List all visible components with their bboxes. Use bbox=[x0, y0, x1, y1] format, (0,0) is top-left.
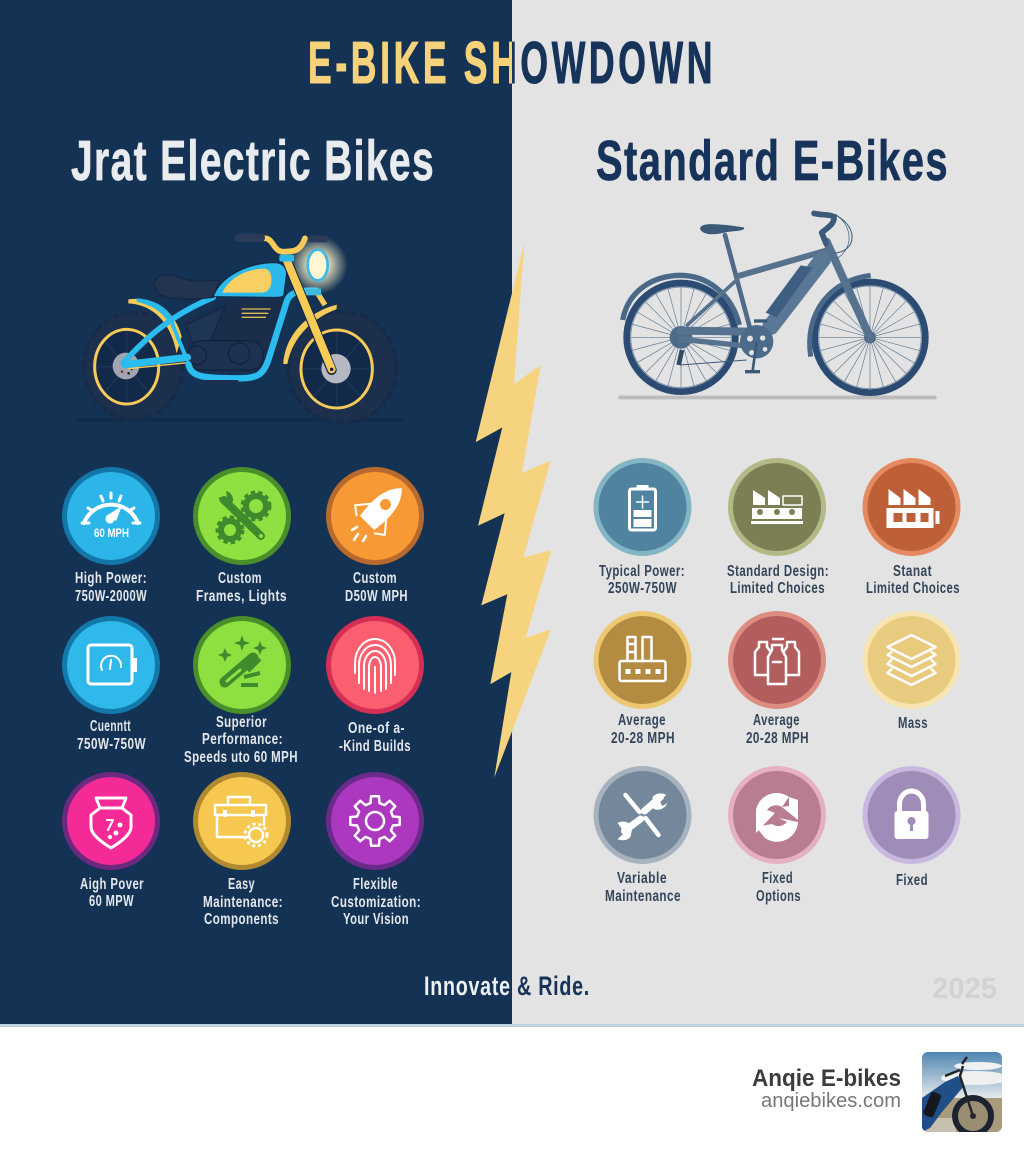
front bike wheel bbox=[810, 275, 925, 393]
icon: padlock bbox=[862, 766, 960, 864]
panel: right grey background bbox=[512, 0, 1024, 1025]
feature: Easy Maintenance: Components bbox=[204, 911, 279, 928]
feature: Variable Maintenance: Maintenance bbox=[605, 888, 681, 905]
feature: Current: 750W-750W bbox=[77, 736, 146, 753]
footer url: anqiebikes.com bbox=[761, 1090, 901, 1112]
front wheel bbox=[288, 312, 397, 423]
feature: Superior Performance: Performance: bbox=[202, 731, 283, 748]
battery bbox=[766, 265, 813, 317]
feature: Custom Frames: Custom bbox=[218, 570, 262, 587]
feature: Average Speed 2 bbox=[728, 611, 826, 747]
icon: factory line bbox=[728, 458, 826, 556]
feature: Flexible Customization: Flexible bbox=[353, 876, 398, 893]
rear fender bbox=[128, 299, 182, 353]
headlight bbox=[308, 250, 328, 280]
feature: High Power 60 bbox=[62, 772, 160, 910]
icon: battery bbox=[594, 458, 692, 556]
feature: Flexible Customization: Customization: bbox=[331, 894, 421, 911]
rear bike wheel bbox=[623, 275, 739, 392]
feature: Stanat bbox=[862, 458, 960, 597]
feature: Fixed Options: Fixed bbox=[762, 870, 793, 887]
feature: Average Speed 2: 20-28 MPH bbox=[746, 730, 809, 747]
feature: Custom Frames: Frames, Lights bbox=[196, 588, 287, 605]
feature: Flexible Customization bbox=[326, 772, 424, 928]
handlebars bbox=[265, 238, 305, 252]
frame bbox=[123, 291, 317, 378]
icon: bottles bbox=[728, 611, 826, 709]
seat bbox=[154, 275, 220, 299]
saddle bbox=[700, 224, 744, 234]
icon: router building bbox=[594, 611, 692, 709]
footer background bbox=[0, 1027, 1024, 1154]
feature: High Power: High Power: bbox=[75, 570, 147, 587]
feature: Average Speed 1 bbox=[594, 611, 692, 747]
feature: Standard Design bbox=[727, 458, 829, 597]
feature: Mass bbox=[862, 611, 960, 732]
year: 2025 bbox=[932, 973, 997, 1005]
feature: High Power 60: Aigh Pover bbox=[80, 876, 144, 893]
title: E-BIKE SHOWDOWN bbox=[308, 30, 716, 96]
feature: One-of-a-Kind Builds bbox=[326, 616, 424, 755]
feature: Easy Maintenance bbox=[193, 772, 291, 928]
icon: wrench and gears bbox=[193, 467, 291, 565]
feature: Typical Power bbox=[594, 458, 692, 597]
panel: left navy background bbox=[0, 0, 512, 1025]
feature: Custom Speed bbox=[326, 467, 424, 605]
front fender bbox=[283, 304, 340, 364]
drivetrain bbox=[679, 319, 773, 373]
feature: Custom Speed: D50W MPH bbox=[345, 588, 408, 605]
feature: Typical Power: Typical Power: bbox=[599, 563, 685, 580]
feature: Current: Cuenntt bbox=[90, 718, 131, 735]
feature: Custom Speed: Custom bbox=[353, 570, 397, 587]
icon: gear bbox=[326, 772, 424, 870]
icon: crossed wrenches bbox=[594, 766, 692, 864]
feature: Average Speed 1: 20-28 MPH bbox=[611, 730, 675, 747]
feature: One-of-a-Kind Builds: One-of a- bbox=[348, 720, 405, 737]
icon: battery gauge bbox=[62, 616, 160, 714]
feature: Typical Power: 250W-750W bbox=[608, 580, 677, 597]
footer thumbnail photo bbox=[922, 1052, 1002, 1132]
icon: shield flask bbox=[62, 772, 160, 870]
icon: sparkling chain bbox=[193, 616, 291, 714]
feature: Fixed bbox=[862, 766, 960, 889]
lightning bolt bbox=[476, 242, 551, 778]
illustration: motorcycle bbox=[77, 234, 405, 423]
feature: Superior Performance: Superior bbox=[216, 714, 267, 731]
feature: High Power 60: 60 MPW bbox=[89, 893, 134, 910]
engine bbox=[183, 298, 290, 372]
feature: Easy Maintenance: Maintenance: bbox=[203, 894, 283, 911]
heading: left: Jrat Electric Bikes bbox=[71, 129, 435, 193]
feature: Flexible Customization: Your Vision bbox=[343, 911, 409, 928]
icon: rocket bbox=[326, 467, 424, 565]
handlebar bbox=[814, 213, 834, 243]
footer brand name: Anqie E-bikes bbox=[752, 1065, 901, 1092]
icon: toolbox bbox=[193, 772, 291, 870]
fork bbox=[317, 292, 325, 305]
icon: factory battery bbox=[862, 458, 960, 556]
feature: Current bbox=[62, 616, 160, 753]
feature: Fixed Options bbox=[728, 766, 826, 905]
feature: Average Speed 2: Average bbox=[753, 712, 800, 729]
feature: Superior Performance bbox=[184, 616, 298, 766]
feature: Custom Frames bbox=[193, 467, 291, 605]
feature: Easy Maintenance: Easy bbox=[228, 876, 255, 893]
feature: One-of-a-Kind Builds: -Kind Builds bbox=[339, 738, 411, 755]
feature: Average Speed 1: Average bbox=[618, 712, 666, 729]
feature: Variable Maintenance bbox=[594, 766, 692, 905]
icon: refresh arrows bbox=[728, 766, 826, 864]
feature: Mass: Mass bbox=[898, 715, 928, 732]
headlight glow bbox=[289, 236, 348, 294]
feature: Stanat: Stanat bbox=[893, 563, 932, 580]
rear wheel bbox=[84, 313, 183, 419]
feature: Superior Performance: Speeds uto 60 MPH bbox=[184, 749, 298, 766]
tagline: Innovate & Ride. bbox=[424, 971, 590, 1001]
icon: stacked layers bbox=[862, 611, 960, 709]
icon: fingerprint bbox=[326, 616, 424, 714]
feature: Standard Design: Standard Design: bbox=[727, 563, 829, 580]
feature: Stanat: Limited Choices bbox=[866, 580, 960, 597]
illustration: standard e-bike bbox=[618, 213, 937, 399]
feature: Fixed Options: Options bbox=[756, 888, 801, 905]
bike frame bbox=[681, 235, 870, 346]
fuel tank bbox=[213, 263, 287, 297]
feature: Variable Maintenance: Variable bbox=[617, 870, 667, 887]
feature: Standard Design: Limited Choices bbox=[730, 580, 825, 597]
feature: High Power bbox=[62, 467, 160, 605]
feature: Fixed: Fixed bbox=[896, 872, 928, 889]
feature: High Power: 750W-2000W bbox=[75, 588, 147, 605]
icon: speedometer: 60 MPH bbox=[94, 526, 129, 540]
